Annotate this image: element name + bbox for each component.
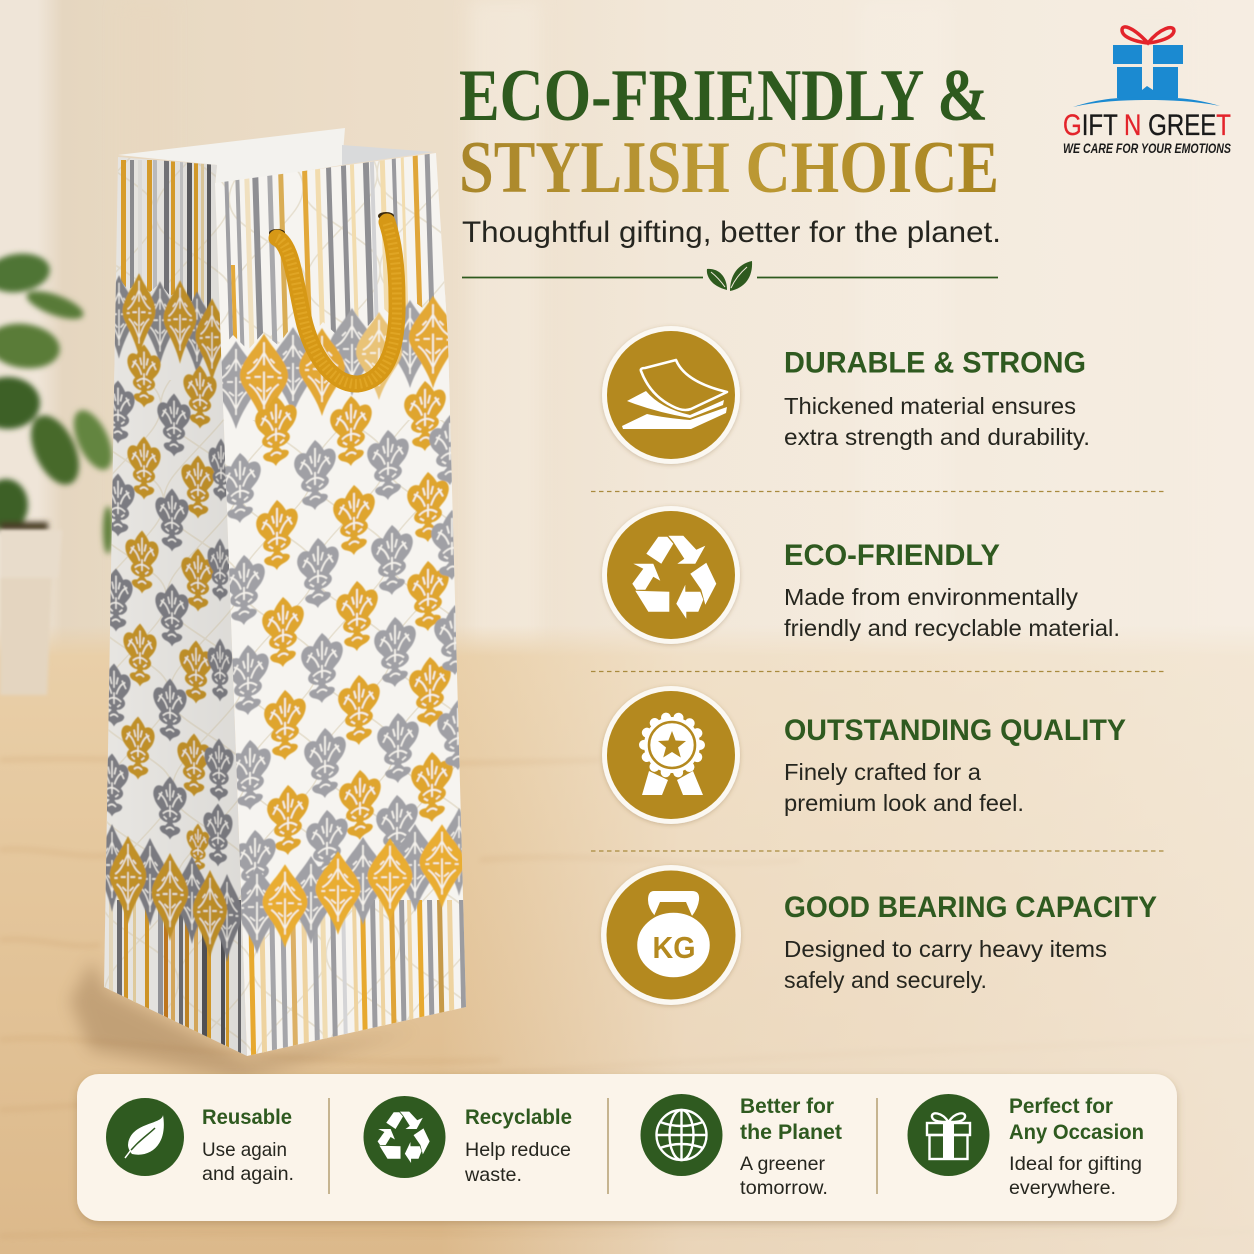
logo gift box xyxy=(1113,45,1183,98)
logo: Gift N Greet xyxy=(1063,27,1231,156)
product: patterned gift bag xyxy=(95,128,480,1070)
description: extra strength and durability. xyxy=(784,424,1090,450)
icon: kettlebell KG: KG xyxy=(652,930,696,965)
bag shadow on table xyxy=(70,960,420,1078)
benefit: reusable: and again. xyxy=(202,1163,294,1185)
title xyxy=(459,55,999,209)
benefit: better for the planet: A greener xyxy=(740,1153,826,1175)
logo wordmark: GIFT N GREET xyxy=(1063,109,1231,142)
heading: OUTSTANDING QUALITY xyxy=(784,714,1126,747)
title: ECO-FRIENDLY & xyxy=(459,55,988,137)
title divider with leaf xyxy=(462,261,998,291)
description xyxy=(784,584,1120,641)
description: Thickened material ensures xyxy=(784,393,1076,419)
bag inner side panel xyxy=(342,145,434,165)
benefit: perfect for any occasion xyxy=(908,1094,1144,1199)
description: Made from environmentally xyxy=(784,584,1079,610)
benefit: better for the planet xyxy=(640,1094,842,1199)
rope handle xyxy=(269,212,397,384)
benefit: reusable: Reusable xyxy=(202,1106,292,1129)
benefit: better for the planet: the Planet xyxy=(740,1121,842,1144)
feature: eco-friendly xyxy=(602,506,1120,644)
description: Designed to carry heavy items xyxy=(784,936,1107,962)
description: premium look and feel. xyxy=(784,790,1024,816)
feature: good bearing capacity xyxy=(601,865,1157,1005)
description xyxy=(784,936,1107,993)
icon: stacked sheets xyxy=(602,326,740,464)
icon: award rosette xyxy=(602,686,740,824)
title: STYLISH CHOICE xyxy=(459,127,999,209)
icon: kettlebell KG xyxy=(601,865,741,1005)
plant in pot (blurred) xyxy=(0,250,120,695)
benefit: recyclable: Help reduce xyxy=(465,1139,571,1161)
heading: GOOD BEARING CAPACITY xyxy=(784,891,1157,924)
logo bow xyxy=(1122,27,1174,43)
benefit: recyclable xyxy=(364,1096,572,1186)
benefit: perfect for any occasion: everywhere. xyxy=(1009,1177,1116,1199)
bag left side face xyxy=(95,150,250,1060)
icon: leaf xyxy=(106,1098,184,1176)
heading: ECO-FRIENDLY xyxy=(784,539,1000,572)
bag front face xyxy=(210,145,480,1070)
bag inner back panel xyxy=(118,128,345,186)
benefit: better for the planet: Better for xyxy=(740,1095,834,1118)
benefit: reusable: Use again xyxy=(202,1139,287,1161)
panel: bottom benefits strip xyxy=(77,1074,1177,1221)
description: safely and securely. xyxy=(784,967,987,993)
feature: durable and strong xyxy=(602,326,1090,464)
benefit: recyclable: waste. xyxy=(464,1164,522,1186)
icon: gift xyxy=(908,1094,990,1176)
benefit: recyclable: Recyclable xyxy=(465,1106,572,1129)
benefit: perfect for any occasion: Perfect for xyxy=(1009,1095,1113,1118)
benefit: perfect for any occasion: Ideal for gifting xyxy=(1009,1153,1142,1175)
icon: recycle xyxy=(364,1096,446,1178)
benefit: better for the planet: tomorrow. xyxy=(740,1177,828,1199)
feature: outstanding quality xyxy=(602,686,1126,824)
logo swoosh xyxy=(1073,97,1220,107)
subtitle: Thoughtful gifting, better for the planet. xyxy=(462,216,1001,249)
icon: recycle xyxy=(602,506,740,644)
benefit: reusable xyxy=(106,1098,294,1185)
description: friendly and recyclable material. xyxy=(784,615,1120,641)
description xyxy=(784,759,1024,816)
description xyxy=(784,393,1090,450)
benefit: perfect for any occasion: Any Occasion xyxy=(1009,1121,1144,1144)
description: Finely crafted for a xyxy=(784,759,981,785)
heading: DURABLE & STRONG xyxy=(784,346,1086,380)
icon: globe xyxy=(640,1094,722,1176)
